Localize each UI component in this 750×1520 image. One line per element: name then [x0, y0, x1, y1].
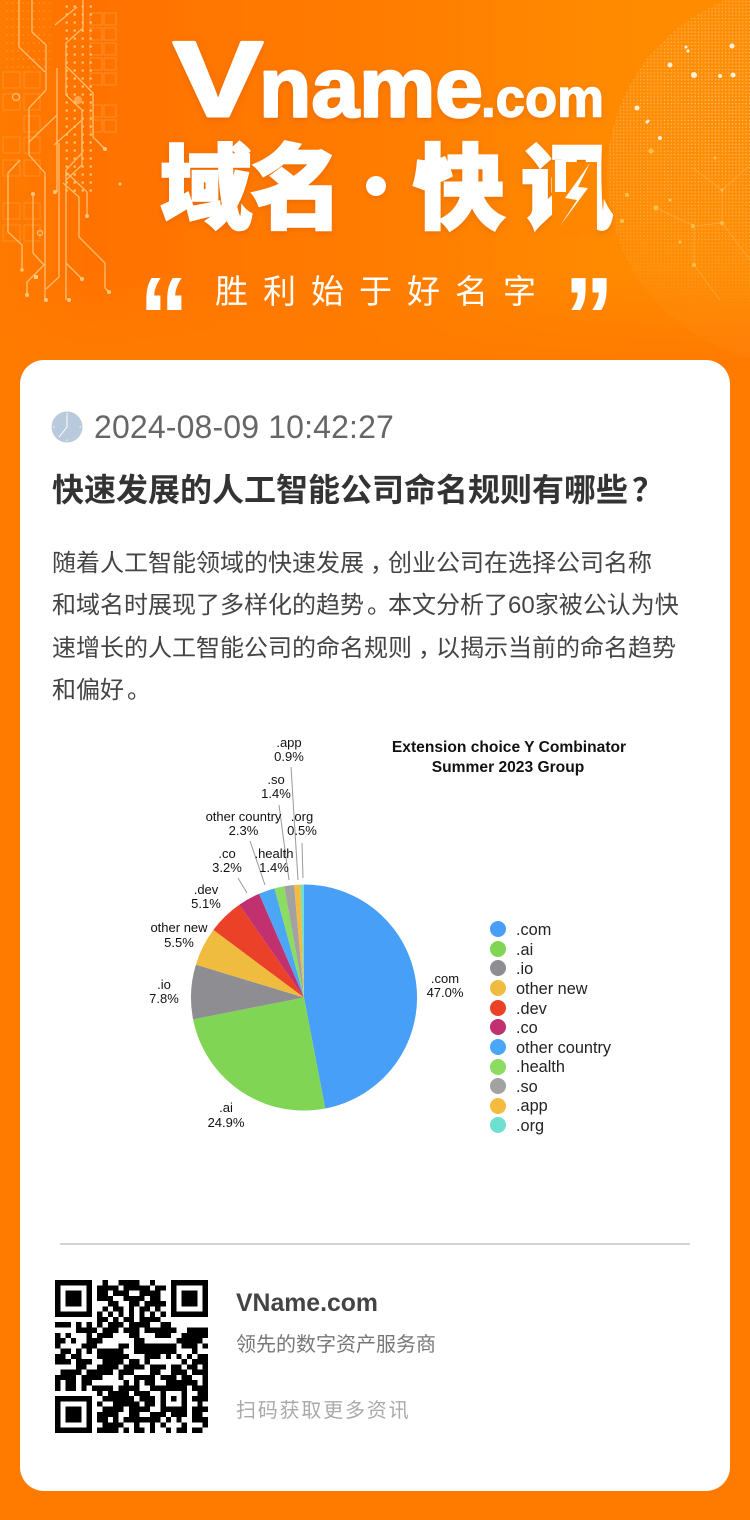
banner title — [160, 115, 613, 248]
slice labels: .so — [267, 772, 285, 787]
slogan text: 胜利始于好名字 — [215, 265, 551, 313]
article body text: 和偏好。 — [52, 677, 151, 704]
banner title: 快 — [413, 115, 505, 248]
icon: lightning bolt in title — [552, 160, 597, 234]
slice labels: .dev — [194, 882, 219, 897]
chart title: Extension choice Y Combinator — [392, 739, 626, 756]
leader lines — [238, 767, 303, 893]
legend: .ai — [516, 941, 533, 959]
pie chart figure — [149, 735, 626, 1135]
legend — [490, 921, 612, 1135]
date: 2024-08-09 10:42:27 — [94, 409, 394, 445]
article body text: 和域名时展现了多样化的趋势。本文分析了60家被公认为快 — [52, 592, 679, 619]
chart title: Summer 2023 Group — [432, 759, 584, 776]
article body text — [52, 550, 679, 704]
legend: .app — [516, 1097, 548, 1115]
slice labels: 24.9% — [208, 1115, 245, 1130]
slice labels: other country — [206, 809, 282, 824]
slice labels: 5.1% — [191, 896, 221, 911]
header banner — [2, 0, 750, 360]
white content card — [20, 360, 730, 1491]
brand name: VName.com — [236, 1290, 378, 1317]
slice labels: .com — [431, 971, 459, 986]
slice labels: 5.5% — [164, 935, 194, 950]
slice labels: 1.4% — [261, 786, 291, 801]
legend: .health — [516, 1058, 565, 1076]
slice labels: 7.8% — [149, 991, 179, 1006]
article title: 快速发展的人工智能公司命名规则有哪些？ — [52, 465, 664, 511]
slice labels: .health — [254, 846, 294, 861]
logo — [173, 19, 604, 139]
legend: other country — [516, 1039, 612, 1057]
brand tagline: 领先的数字资产服务商 — [236, 1334, 436, 1356]
logo: V — [173, 19, 263, 139]
QR code — [55, 1280, 208, 1433]
slice labels: .org — [291, 809, 313, 824]
scan prompt: 扫码获取更多资讯 — [236, 1400, 410, 1422]
pie slices — [191, 884, 417, 1111]
article body text: 速增长的人工智能公司的命名规则，以揭示当前的命名趋势 — [52, 635, 676, 662]
slice labels: 2.3% — [229, 823, 259, 838]
icon: clock — [52, 412, 82, 442]
globe decoration — [600, 0, 750, 363]
legend: .com — [516, 921, 551, 939]
legend: .dev — [516, 1000, 548, 1018]
chart title — [392, 739, 626, 776]
slogan — [139, 254, 614, 380]
logo: name — [259, 40, 483, 134]
slice labels: .io — [157, 977, 171, 992]
slice labels: 47.0% — [427, 985, 464, 1000]
slice labels: 1.4% — [259, 860, 289, 875]
slice labels: .co — [218, 846, 236, 861]
slice labels: .app — [276, 735, 302, 750]
legend: .co — [516, 1019, 538, 1037]
banner title: 名 — [251, 115, 343, 248]
slice labels — [149, 735, 464, 1130]
banner title: 域 — [160, 115, 252, 248]
logo: .com — [481, 68, 604, 128]
legend: .org — [516, 1117, 544, 1135]
slice labels: 3.2% — [212, 860, 242, 875]
article body text: 随着人工智能领域的快速发展，创业公司在选择公司名称 — [52, 550, 652, 577]
slice labels: other new — [150, 920, 208, 935]
slice labels: 0.5% — [287, 823, 317, 838]
slice labels: .ai — [219, 1100, 233, 1115]
circuit decoration — [3, 0, 122, 302]
banner title: 讯 — [521, 115, 613, 248]
slice labels: 0.9% — [274, 749, 304, 764]
legend: other new — [516, 980, 588, 998]
legend: .so — [516, 1078, 538, 1096]
legend: .io — [516, 960, 533, 978]
